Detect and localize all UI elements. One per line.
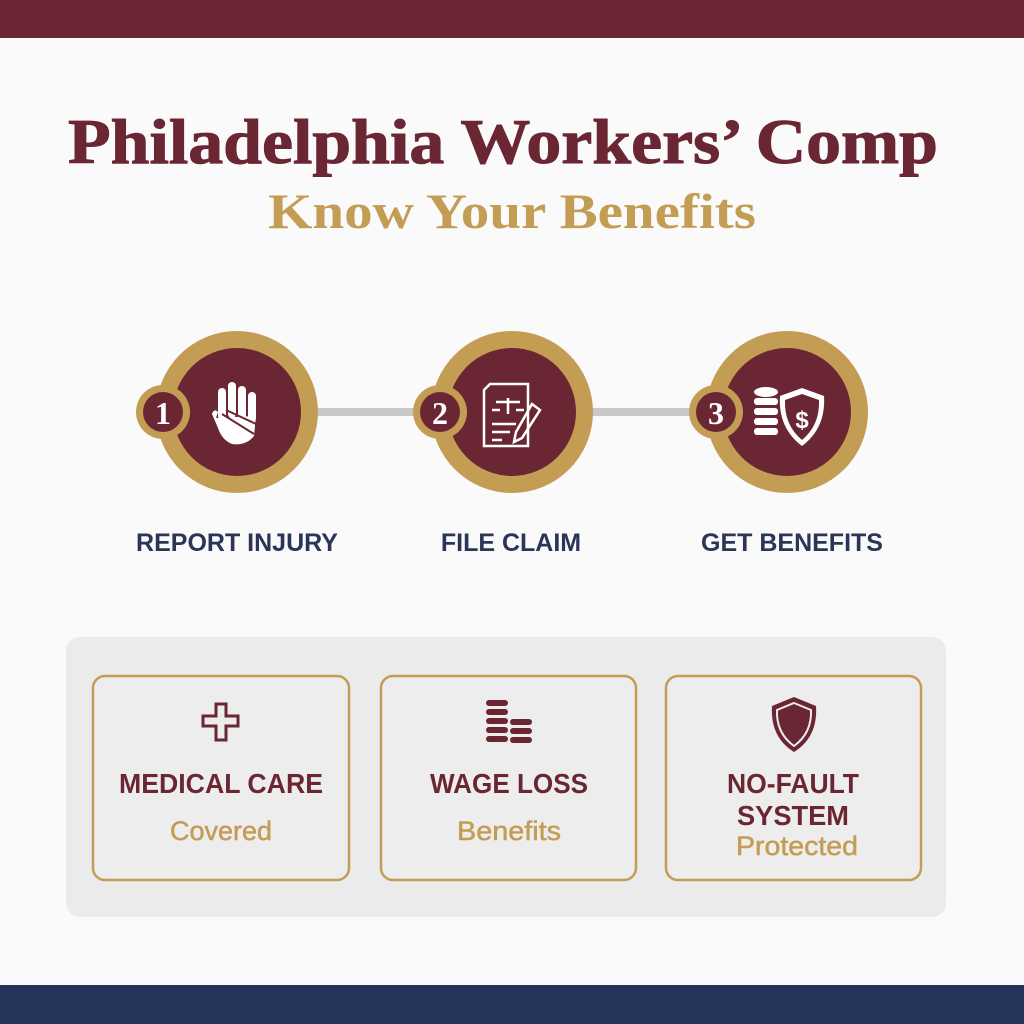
subtitle: Know Your Benefits: [268, 183, 756, 239]
step 3: get benefits: [689, 331, 883, 557]
icon: coins and shield: [754, 387, 824, 446]
card: medical care: [93, 676, 349, 880]
step 1: report injury: [136, 331, 338, 557]
top bar: [0, 0, 1024, 38]
card: wage loss: Benefits: [457, 816, 561, 846]
card: no-fault system: [666, 676, 921, 880]
icon: hand: [212, 382, 256, 444]
card: medical care: Covered: [170, 816, 272, 846]
card: medical care: MEDICAL CARE: [119, 768, 323, 799]
card: no-fault system: NO-FAULT: [727, 768, 859, 799]
step 3: get benefits: $: [795, 407, 809, 434]
step 2: file claim: 2: [432, 395, 448, 431]
icon: document with scales and pen: [484, 384, 540, 446]
icon: cross: [203, 704, 238, 740]
step 3: get benefits: GET BENEFITS: [701, 529, 883, 557]
step 1: report injury: REPORT INJURY: [136, 529, 338, 557]
bottom bar: [0, 985, 1024, 1024]
card: wage loss: WAGE LOSS: [430, 768, 588, 799]
icon: shield: [772, 697, 816, 752]
panel: benefits: [66, 637, 946, 917]
step 2: file claim: [413, 331, 593, 557]
icon: coin stacks: [486, 700, 532, 743]
connector lines: [310, 408, 715, 416]
step 1: report injury: 1: [155, 395, 171, 431]
card: wage loss: [381, 676, 636, 880]
card: no-fault system: Protected: [736, 831, 858, 861]
step 3: get benefits: 3: [708, 395, 724, 431]
title: Philadelphia Workers’ Comp: [68, 106, 938, 177]
card: no-fault system: SYSTEM: [737, 800, 849, 831]
step 2: file claim: FILE CLAIM: [441, 529, 581, 557]
